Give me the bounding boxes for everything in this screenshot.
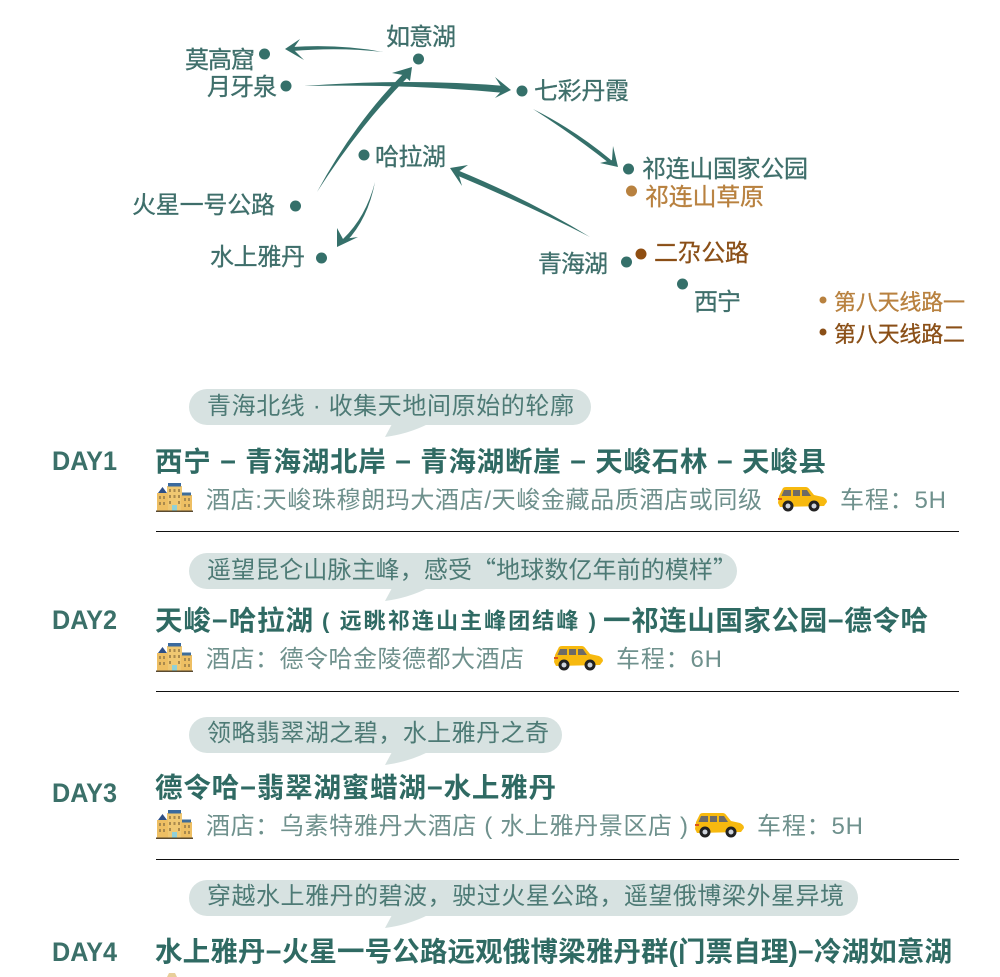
day label: DAY2: DAY2 [52, 605, 117, 635]
location: 西宁 [677, 278, 741, 316]
location: 西宁: 西宁 [694, 289, 741, 316]
icon: hotel [167, 973, 177, 977]
location: 七彩丹霞: 七彩丹霞 [534, 78, 629, 105]
panel: day 4 [52, 880, 952, 977]
icon: hotel [156, 810, 193, 839]
hotel text: day 2: 酒店：德令哈金陵德都大酒店 [206, 646, 524, 673]
route title: day 2: ( 远眺祁连山主峰团结峰 ) [322, 608, 596, 634]
arrow: 哈拉湖 to 水上雅丹 [337, 182, 375, 247]
day label: DAY3: DAY3 [52, 778, 117, 808]
drive time: day 2: 车程：6H [616, 646, 722, 673]
route title: day 1: 西宁 − 青海湖北岸 − 青海湖断崖 − 天峻石林 − 天峻县 [155, 446, 826, 477]
legend item: 第八天线路一: 第八天线路一 [834, 290, 965, 315]
speech bubble: day 4: 穿越水上雅丹的碧波，驶过火星公路，遥望俄博梁外星异境 [207, 883, 844, 910]
legend [820, 290, 965, 347]
route title: day 4: 水上雅丹−火星一号公路远观俄博梁雅丹群(门票自理)−冷湖如意湖 [155, 936, 952, 967]
arrow: 火星一号公路 to 如意湖 [317, 67, 412, 192]
panel: day 3 [52, 717, 959, 860]
panel: day 1 [52, 389, 959, 532]
location: 祁连山国家公园: 祁连山国家公园 [642, 156, 808, 183]
legend item: 第八天线路二: 第八天线路二 [834, 322, 965, 347]
drive time: day 1: 车程：5H [840, 487, 946, 514]
location: 二尕公路: 二尕公路 [654, 240, 749, 267]
speech bubble: day 3: 领略翡翠湖之碧，水上雅丹之奇 [207, 720, 549, 747]
icon: car [695, 813, 744, 838]
route title: day 2: 天峻−哈拉湖 [155, 605, 313, 636]
location: 火星一号公路: 火星一号公路 [132, 192, 275, 219]
route title: day 2 [155, 605, 928, 636]
route title: day 3: 德令哈−翡翠湖蜜蜡湖−水上雅丹 [155, 772, 556, 803]
arrow: 月牙泉 to 七彩丹霞 [304, 77, 511, 98]
hotel text: day 1: 酒店:天峻珠穆朗玛大酒店/天峻金藏品质酒店或同级 [206, 487, 762, 514]
arrow: 如意湖 to 莫高窟 [285, 39, 383, 60]
speech bubble: day 2: 遥望昆仑山脉主峰，感受“地球数亿年前的模样” [207, 550, 737, 585]
location: 如意湖: 如意湖 [386, 24, 456, 51]
icon: car [778, 487, 827, 512]
location: 月牙泉: 月牙泉 [207, 74, 277, 101]
location: 祁连山草原: 祁连山草原 [645, 184, 764, 211]
route map [132, 24, 808, 316]
location: 青海湖: 青海湖 [538, 251, 608, 278]
location: 水上雅丹: 水上雅丹 [210, 244, 305, 271]
speech bubble: day 3 [189, 717, 562, 765]
arrow: 青海湖 to 哈拉湖 [450, 165, 590, 237]
drive time: day 3: 车程：5H [757, 813, 863, 840]
speech bubble: day 1 [189, 389, 591, 437]
speech bubble: day 2 [189, 550, 737, 601]
icon: hotel [156, 643, 193, 672]
location: 莫高窟: 莫高窟 [185, 47, 255, 74]
icon: hotel [156, 483, 193, 512]
day label: DAY1: DAY1 [52, 446, 117, 476]
speech bubble: day 1: 青海北线 · 收集天地间原始的轮廓 [207, 393, 574, 420]
speech bubble: day 4 [189, 880, 858, 928]
panel: day 2 [52, 550, 959, 692]
route title: day 2: 一祁连山国家公园−德令哈 [603, 605, 928, 636]
day label: DAY4: DAY4 [52, 937, 117, 967]
hotel text: day 3: 酒店：乌素特雅丹大酒店 ( 水上雅丹景区店 ) [206, 813, 688, 840]
icon: car [554, 646, 603, 670]
arrow: 七彩丹霞 to 祁连山国家公园 [533, 109, 618, 167]
location: 哈拉湖: 哈拉湖 [375, 144, 446, 171]
location: 如意湖 [386, 24, 456, 64]
